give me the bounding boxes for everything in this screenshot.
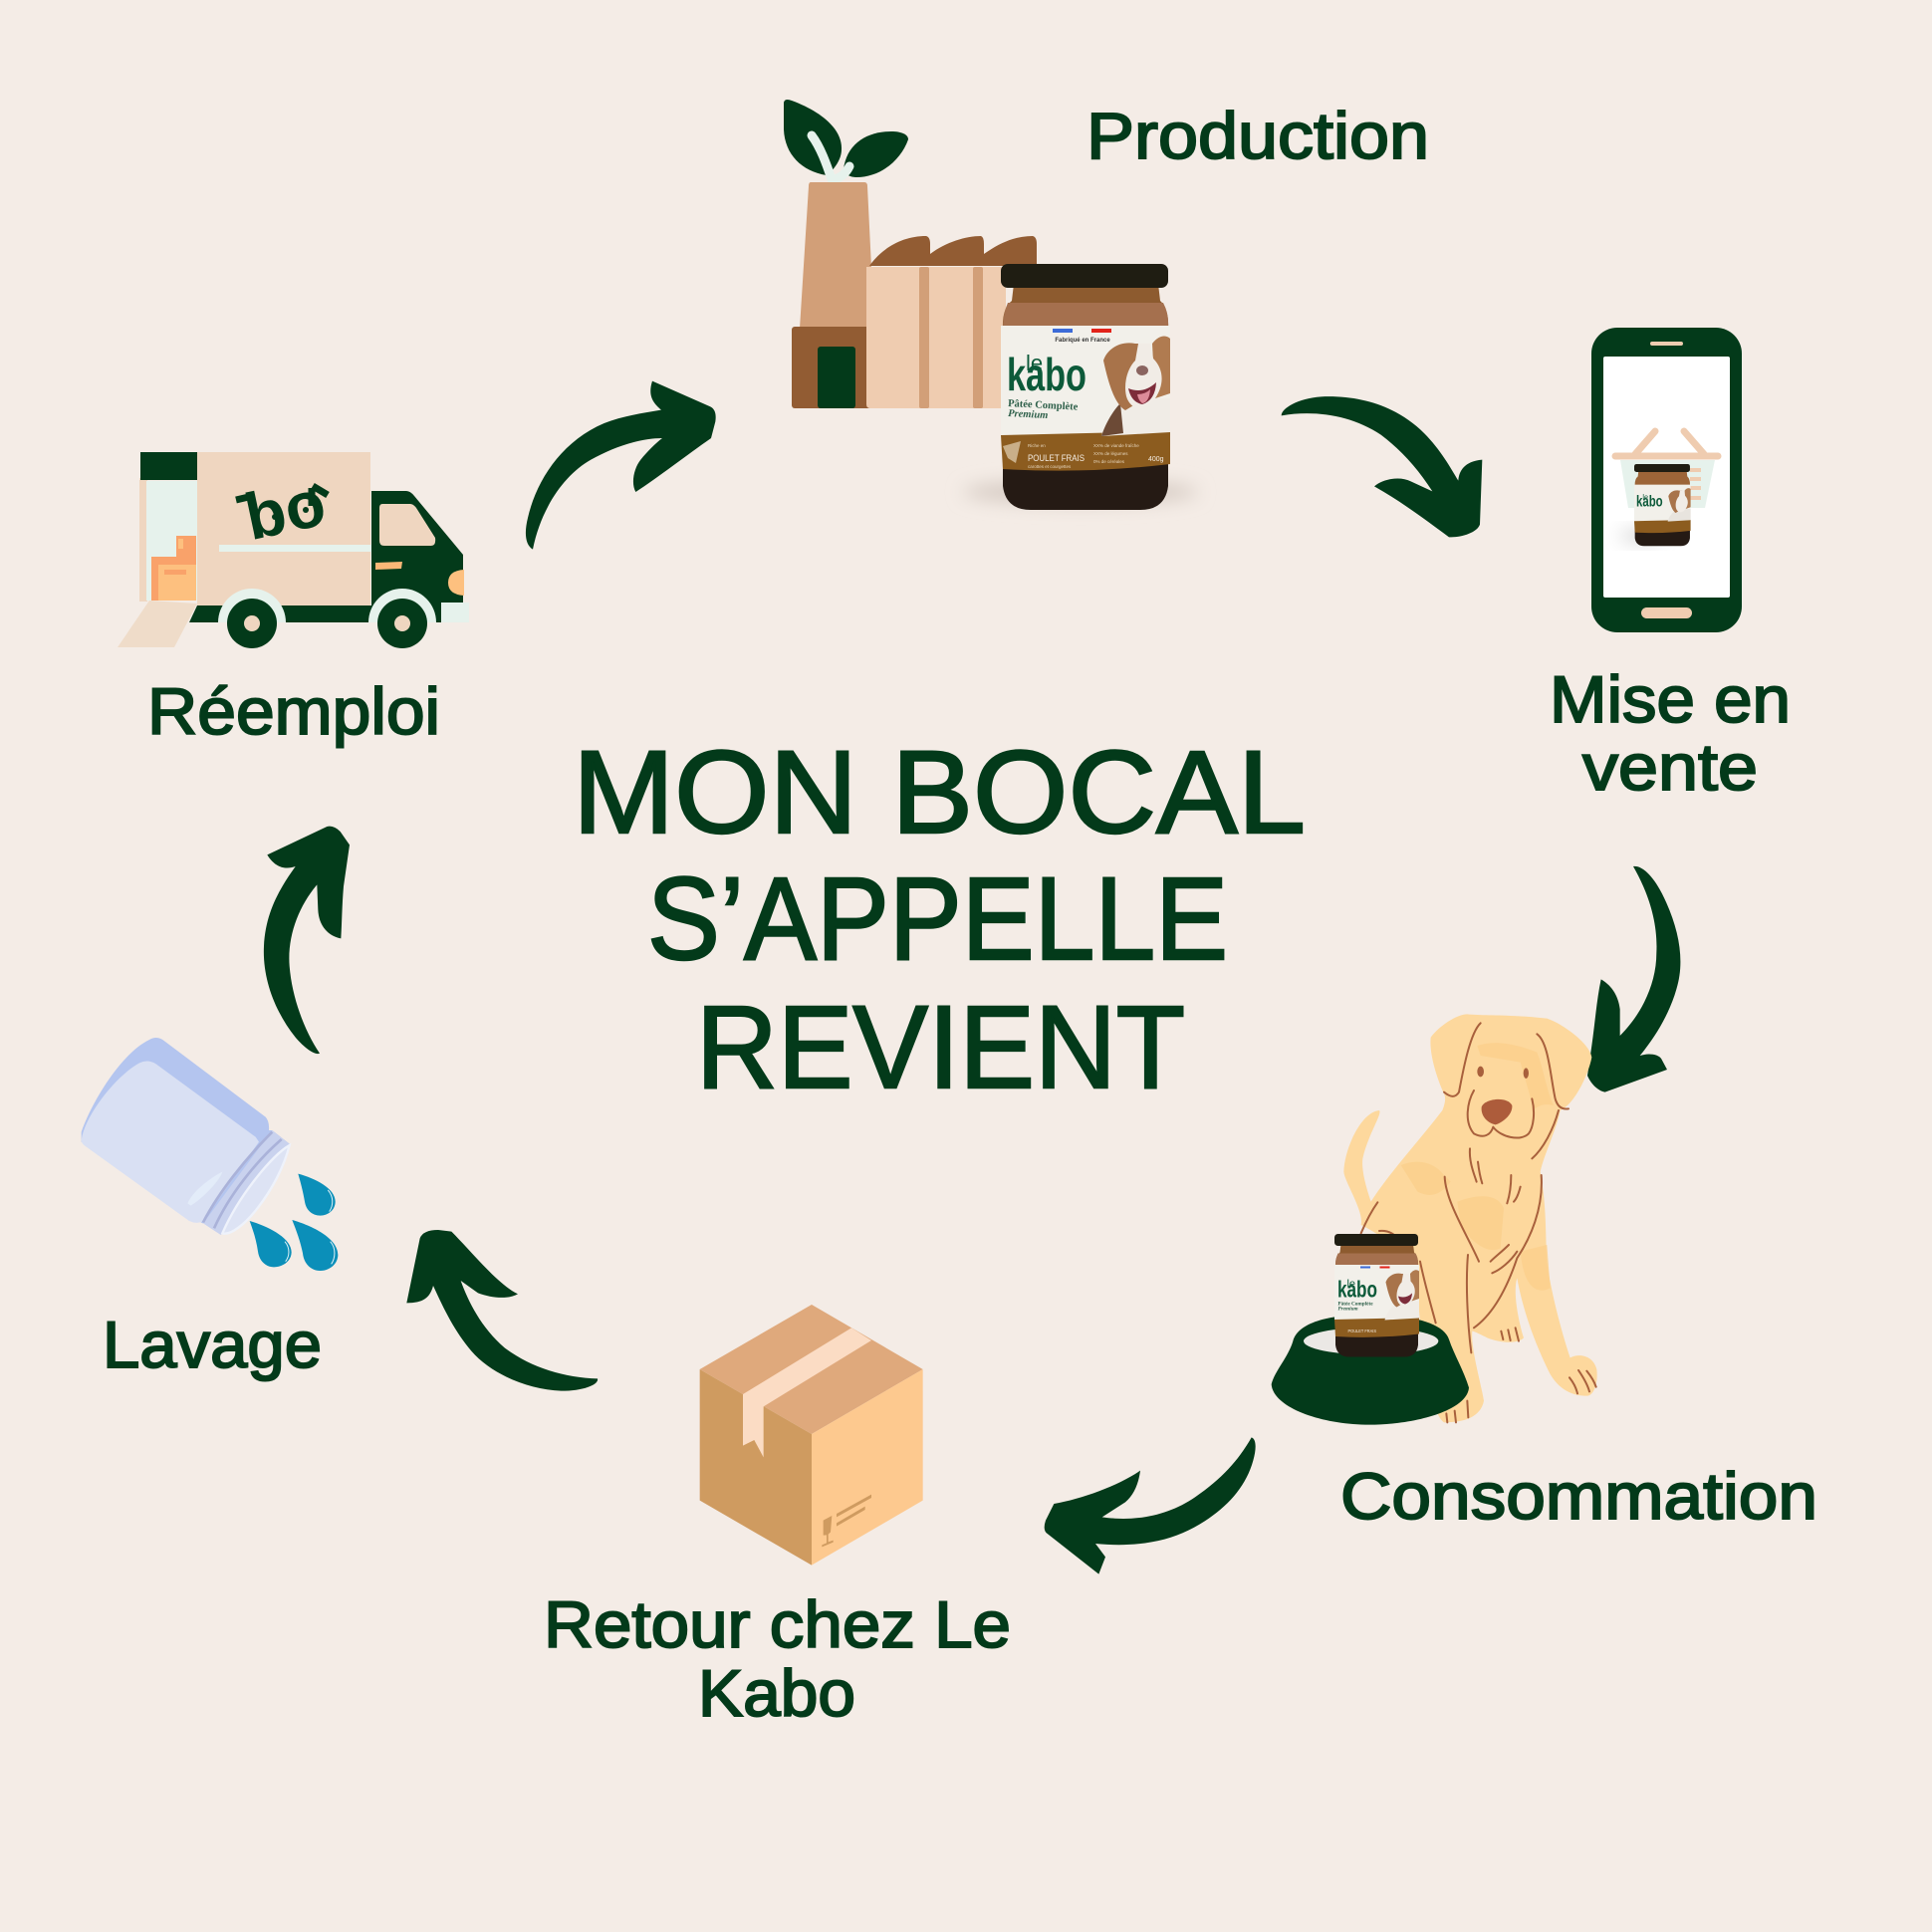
factory building (866, 267, 1006, 408)
phone speaker (1650, 342, 1683, 346)
heading: Mise en vente: vente (1582, 730, 1758, 804)
chassis (189, 605, 371, 622)
dog portrait (1101, 337, 1170, 436)
parcels (151, 536, 196, 601)
icon: factory (784, 100, 1037, 408)
icon: cardboard box (700, 1305, 923, 1566)
food bowl (1272, 1315, 1469, 1425)
product jar: Le Kabo large: Riche en (1028, 443, 1046, 448)
product jar in phone (1634, 464, 1691, 546)
product jar on bowl: POULET FRAIS (1347, 1328, 1376, 1333)
product jar: Le Kabo large: Premium (1008, 408, 1049, 421)
title: MON BOCAL (573, 727, 1306, 858)
product jar: Le Kabo large: POULET FRAIS (1028, 453, 1085, 463)
icon: washed jar with drops (82, 1038, 338, 1271)
product jar: Le Kabo large: le (1026, 351, 1043, 375)
cab window (379, 504, 435, 546)
product jar: Le Kabo large (1001, 264, 1170, 510)
jar shadow in phone (1619, 531, 1663, 541)
product jar on bowl: Premium (1337, 1306, 1358, 1312)
arrow: lavage to reemploi (264, 827, 350, 1054)
door handle (375, 562, 402, 570)
heading: Retour chez Le Kabo: Kabo (698, 1656, 855, 1730)
box top (700, 1305, 923, 1434)
product jar: Le Kabo large: XX% de légumes (1093, 451, 1128, 456)
heading: Mise en vente: Mise en (1550, 662, 1791, 736)
arrow: consommation to retour (1045, 1437, 1256, 1574)
dog face (1477, 1067, 1529, 1124)
headlight (448, 570, 464, 596)
product jar: Le Kabo large: kabo (1007, 349, 1087, 400)
arrow: retour to lavage (406, 1230, 598, 1391)
box left face (700, 1369, 812, 1566)
arrows (264, 381, 1680, 1574)
product jar: Le Kabo large: 400g (1148, 456, 1164, 463)
flag marks (1053, 329, 1111, 333)
arrow: mise en vente to consommation (1587, 866, 1680, 1092)
product jar: Le Kabo large: XX% de viande fraîche (1093, 443, 1139, 448)
arrow: reemploi to production (526, 381, 716, 550)
product jar: Le Kabo large: Fabriqué en France (1055, 338, 1110, 344)
product jar on bowl: le (1346, 1278, 1355, 1290)
product jar on bowl (1334, 1234, 1419, 1356)
jar opening (222, 1145, 290, 1234)
jar neck (203, 1130, 291, 1235)
dog shading patches (1401, 1043, 1554, 1291)
truck logo: bo (238, 465, 332, 554)
heading: Retour chez Le Kabo: Retour chez Le (544, 1587, 1011, 1661)
heading: Consommation: Consommation (1340, 1459, 1817, 1533)
ramp (118, 601, 197, 647)
product jar: Le Kabo large: Pâtée Complète (1008, 398, 1079, 413)
factory roof (869, 236, 1037, 266)
title (573, 727, 1306, 1113)
dog line work (1361, 1023, 1596, 1422)
leaves (784, 100, 908, 179)
heading: Réemploi: Réemploi (147, 674, 440, 748)
cargo stripe (219, 545, 371, 552)
product jar on bowl: Pâtée Complète (1337, 1301, 1373, 1307)
heading: Lavage: Lavage (103, 1308, 322, 1381)
drops (250, 1174, 338, 1271)
product jar on bowl: kabo (1337, 1276, 1377, 1302)
truck cargo box (197, 452, 370, 605)
chimney (800, 182, 874, 329)
dog body (1343, 1014, 1597, 1422)
bumper (441, 603, 469, 622)
basket (1615, 431, 1718, 508)
heading: Retour chez Le Kabo (544, 1587, 1011, 1730)
product jar: Le Kabo large: 0% de céréales (1093, 459, 1125, 464)
fragile marking (822, 1495, 871, 1547)
heading: Production: Production (1087, 99, 1429, 172)
product jar in phone: kabo (1636, 493, 1663, 510)
icon: dog with bowl (1272, 1014, 1597, 1425)
heading: Mise en vente (1550, 662, 1791, 804)
icon: phone (1591, 328, 1742, 632)
arrow: production to mise en vente (1282, 396, 1482, 537)
truck cab (371, 491, 463, 622)
wheels (218, 589, 436, 648)
packing tape (743, 1328, 871, 1457)
product jar in phone: le (1642, 493, 1648, 502)
icon: delivery truck (118, 452, 469, 648)
drop highlights (285, 1190, 335, 1264)
title: REVIENT (696, 982, 1185, 1113)
highlight (187, 1172, 222, 1206)
jar back (82, 1038, 291, 1223)
jar threads (203, 1132, 282, 1228)
product jar: Le Kabo large: carottes et courgettes (1028, 464, 1072, 469)
box right face (812, 1369, 923, 1566)
truck rear frame (139, 452, 198, 602)
phone home button (1641, 607, 1692, 618)
factory base with door (792, 327, 871, 408)
jar shadow (963, 480, 1198, 504)
jar front (82, 1062, 259, 1223)
title: S’APPELLE (647, 853, 1228, 985)
